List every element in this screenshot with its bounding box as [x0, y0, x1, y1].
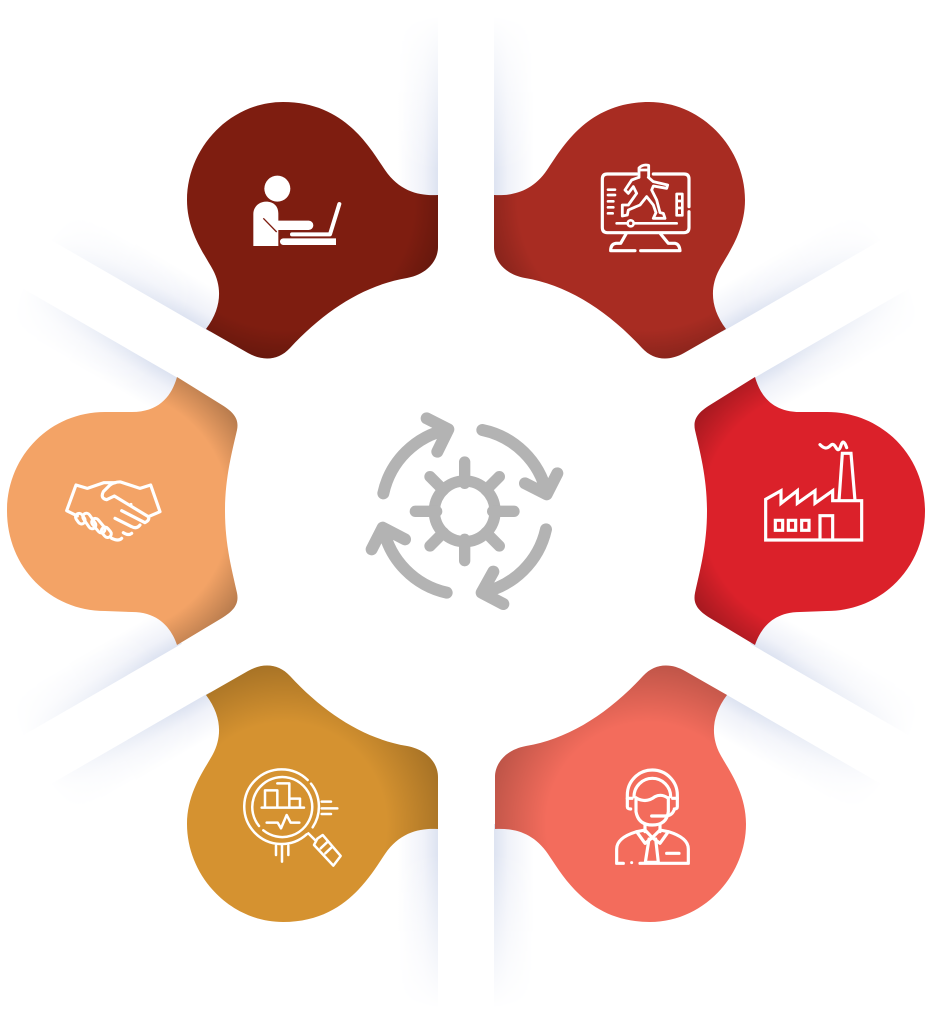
panel: left petal, light orange	[7, 377, 237, 645]
arrow: bottom left	[372, 528, 447, 593]
icon: factory	[766, 442, 862, 540]
panel: right petal, bright red	[695, 377, 925, 645]
panel: top-left petal, dark brown	[187, 102, 438, 358]
arrow: top right	[482, 430, 557, 494]
gear	[415, 462, 514, 561]
arrow: bottom right	[482, 529, 546, 604]
icon: magnifier over chart	[244, 769, 341, 866]
panel: bottom-right petal, coral	[495, 666, 746, 922]
arrow: top left	[383, 418, 448, 493]
panel: bottom-left petal, ochre	[187, 666, 438, 922]
icon: central gear with four circular arrows	[372, 418, 557, 604]
icon: monitor with running figure	[602, 165, 689, 251]
panel: top-right petal, brick red	[494, 102, 745, 358]
icon: person working on laptop	[253, 176, 339, 246]
icon: customer support agent with headset	[617, 770, 688, 864]
icon: handshake	[67, 482, 160, 540]
